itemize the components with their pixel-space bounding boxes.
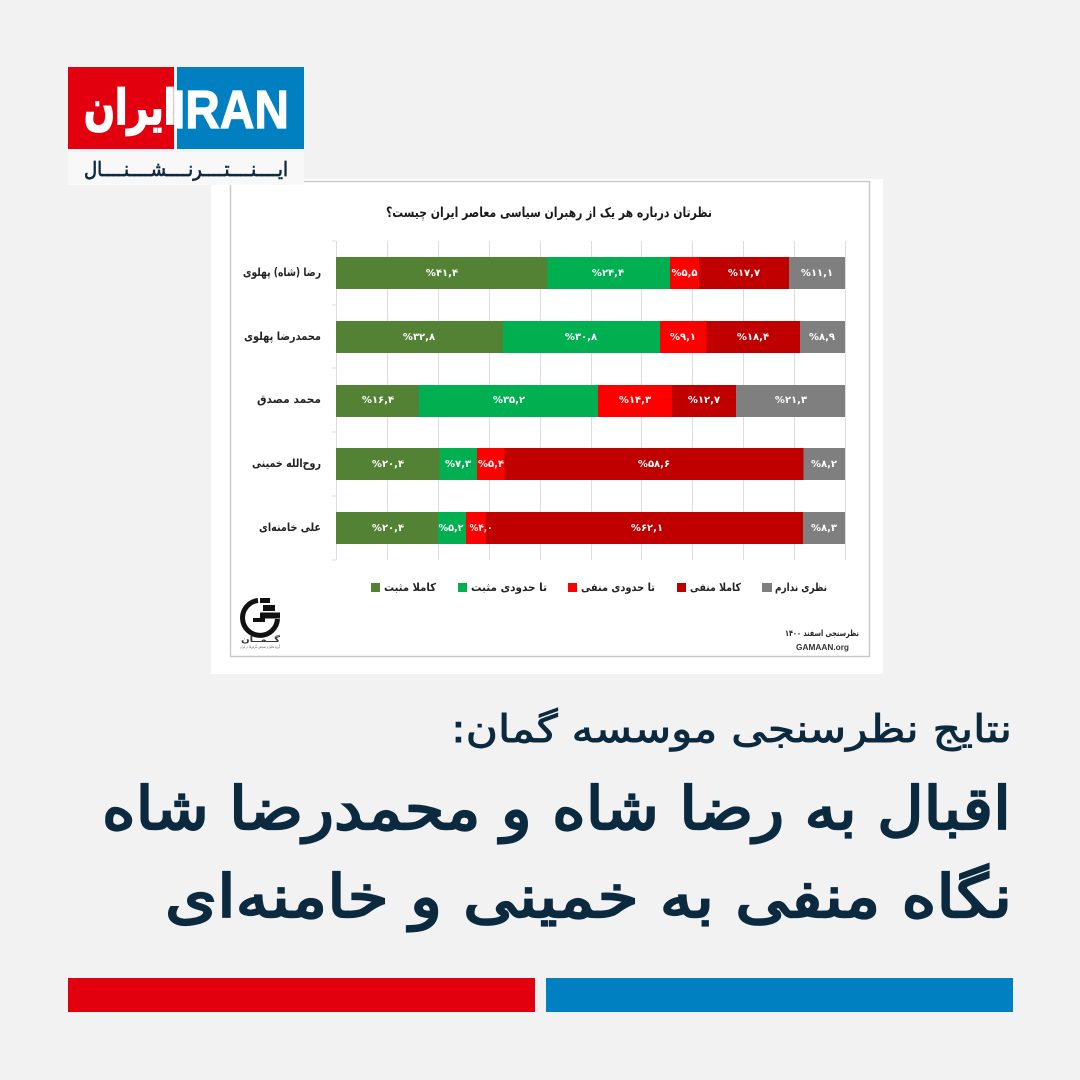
- row: Mohammad Mosaddegh: %۱۲,۷: [688, 395, 720, 406]
- headline line 2: نگاه منفی به خمینی و خامنه‌ای: [165, 862, 1012, 932]
- row: Reza Shah Pahlavi: %۱۷,۷: [728, 268, 760, 279]
- logo: Iran International: [68, 67, 304, 185]
- chart panel: [211, 179, 883, 674]
- logo: Iran International: ایــــنــــتــــرنــــشــــنــــال: [84, 157, 288, 181]
- row: Reza Shah Pahlavi: [243, 257, 845, 289]
- row: Ruhollah Khomeini: %۷,۳: [445, 459, 471, 470]
- row: Ruhollah Khomeini: [252, 448, 845, 480]
- row: Reza Shah Pahlavi: %۲۴,۴: [592, 268, 624, 279]
- logo: Iran International: IRAN: [172, 80, 289, 140]
- icon: Gamaan logo: گروه تحلیل و سنجش نگرش‌ها در ایران: [240, 644, 280, 649]
- row: Mohammad Reza Pahlavi: %۳۰,۸: [565, 332, 597, 343]
- row: Ali Khamenei: %۴,۰: [470, 523, 492, 534]
- icon: Gamaan logo: گــمــان: [241, 634, 280, 644]
- row: Mohammad Mosaddegh: %۳۵,۲: [493, 395, 525, 406]
- icon: Gamaan logo: [240, 598, 280, 649]
- row: Ali Khamenei: [259, 512, 845, 544]
- row: Mohammad Mosaddegh: [257, 385, 845, 417]
- legend: کاملا مثبت: [384, 581, 437, 594]
- row: Reza Shah Pahlavi: %۴۱,۴: [426, 268, 458, 279]
- row: Mohammad Reza Pahlavi: %۱۸,۴: [737, 332, 769, 343]
- row: Ali Khamenei: علی خامنه‌ای: [259, 520, 321, 534]
- row: Ruhollah Khomeini: %۸,۲: [811, 459, 837, 470]
- legend: تا حدودی مثبت: [471, 581, 547, 594]
- chart title: نظرتان درباره هر یک از رهبران سیاسی معاصر ایران چیست؟: [386, 205, 712, 221]
- row: Mohammad Reza Pahlavi: محمدرضا پهلوی: [244, 329, 321, 344]
- row: Ali Khamenei: %۲۰,۴: [372, 523, 404, 534]
- row: Mohammad Reza Pahlavi: %۹,۱: [670, 332, 696, 343]
- legend: نظری ندارم: [775, 581, 827, 594]
- row: Mohammad Mosaddegh: %۱۶,۴: [362, 395, 394, 406]
- row: Reza Shah Pahlavi: %۱۱,۱: [801, 268, 833, 279]
- headline line 1: اقبال به رضا شاه و محمدرضا شاه: [102, 774, 1011, 844]
- row: Ali Khamenei: %۸,۳: [811, 523, 837, 534]
- source note: [785, 629, 859, 652]
- red bar: [68, 978, 535, 1012]
- source note: نظرسنجی اسفند ۱۴۰۰: [785, 629, 859, 639]
- legend: کاملا منفی: [690, 581, 742, 594]
- row: Ali Khamenei: %۶۲,۱: [631, 523, 663, 534]
- row: Mohammad Reza Pahlavi: %۳۲,۸: [403, 332, 435, 343]
- row: Mohammad Mosaddegh: محمد مصدق: [257, 392, 321, 406]
- row: Mohammad Mosaddegh: %۲۱,۳: [775, 395, 807, 406]
- row: Mohammad Reza Pahlavi: [244, 321, 845, 353]
- row: Ruhollah Khomeini: %۵۸,۶: [638, 459, 670, 470]
- source note: GAMAAN.org: [796, 642, 849, 652]
- headline intro: نتایج نظرسنجی موسسه گمان:: [451, 707, 1012, 752]
- row: Reza Shah Pahlavi: %۵,۵: [672, 268, 698, 279]
- legend: تا حدودی منفی: [581, 581, 655, 594]
- blue bar: [546, 978, 1013, 1012]
- row: Reza Shah Pahlavi: رضا (شاه) پهلوی: [243, 265, 321, 280]
- logo: Iran International: ایران: [84, 80, 176, 136]
- row: Mohammad Mosaddegh: %۱۴,۳: [619, 395, 651, 406]
- row: Ali Khamenei: %۵,۲: [438, 523, 464, 534]
- row: Ruhollah Khomeini: %۲۰,۴: [372, 459, 404, 470]
- legend: [371, 581, 827, 594]
- row: Ruhollah Khomeini: %۵,۴: [478, 459, 504, 470]
- row: Ruhollah Khomeini: روح‌الله خمینی: [252, 456, 321, 471]
- row: Mohammad Reza Pahlavi: %۸,۹: [809, 332, 835, 343]
